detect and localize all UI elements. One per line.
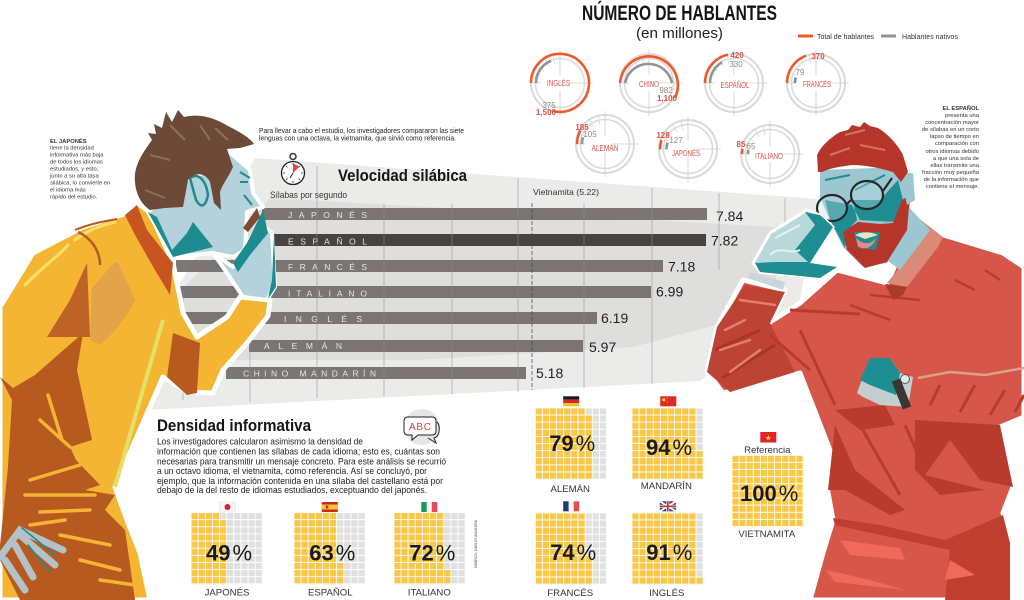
icon: abc speech bubbles — [404, 409, 440, 445]
annotation: el español: ellas transmite una — [930, 163, 980, 169]
annotation: el japonés: informativa más baja — [50, 152, 104, 158]
teal back of hand — [860, 358, 900, 395]
chart background wedge — [147, 158, 818, 410]
flag: uk — [660, 501, 676, 511]
gauge: chino — [620, 50, 682, 116]
bar: alemán: 5.97 — [589, 339, 616, 355]
bar: alemán — [249, 339, 616, 355]
annotation: el japonés: el idioma más — [50, 188, 86, 194]
illustration: man in yellow sweater whispering — [0, 110, 276, 600]
annotation: el español: presenta una — [945, 113, 980, 119]
axis label: sílabas por segundo: Sílabas por segundo — [270, 189, 347, 200]
waffle: español: ESPAÑOL — [308, 588, 353, 598]
gauge: alemán: 105 — [583, 130, 597, 139]
lips — [856, 238, 876, 248]
gauge: francés — [787, 50, 849, 116]
gauge: alemán: 185 — [575, 123, 589, 132]
density paragraph: Los investigadores calcularon asimismo la densidad de — [157, 436, 363, 446]
hair — [817, 122, 908, 182]
neck and face — [148, 150, 263, 257]
gauge: español: ESPAÑOL — [720, 81, 750, 90]
teal hand shadow — [233, 210, 276, 299]
legend — [798, 32, 958, 41]
annotation: el japonés: rápido del estudio. — [50, 194, 98, 200]
annotation: el español: EL ESPAÑOL — [942, 105, 979, 112]
waffle: francés: FRANCÉS — [547, 588, 593, 599]
gauge: alemán — [575, 111, 638, 177]
sweater silhouette — [0, 203, 270, 600]
gauge: chino: 982 — [659, 86, 673, 95]
collar v-neck shade — [885, 284, 907, 300]
waffle: alemán — [536, 396, 607, 495]
gauge: chino: CHINO — [639, 80, 659, 89]
gauge: italiano: 65 — [747, 142, 756, 151]
waffle: alemán: 79% — [549, 431, 595, 456]
annotation: el japonés: junto a su alta tasa — [49, 174, 99, 180]
icon: stopwatch — [282, 154, 304, 184]
teal face shading — [825, 180, 903, 248]
bar: japonés: JAPONÉS — [288, 210, 367, 220]
waffle: inglés: INGLÉS — [649, 588, 684, 599]
annotation: el español: a que una sola de — [933, 156, 979, 162]
bar: italiano — [176, 284, 683, 300]
watch face — [900, 374, 910, 384]
waffle: vietnamita: VIETNAMITA — [738, 529, 796, 540]
shirt collar — [887, 217, 943, 287]
density paragraph: debajo de la del resto de idiomas estudiados, exceptuando del japonés. — [157, 485, 427, 495]
bar: español: ESPAÑOL — [288, 236, 367, 246]
waffle: japonés: JAPONÉS — [205, 588, 249, 598]
density paragraph: información que contienen las sílabas de cada idioma; esto es, cuántas son — [157, 446, 440, 456]
annotation: el español: de sílabas en un corto — [922, 127, 979, 133]
watch hand — [857, 358, 913, 407]
flag: japan — [220, 502, 236, 512]
icon: abc speech bubbles: ABC — [409, 422, 431, 433]
waffle: inglés — [632, 501, 704, 599]
mustache — [243, 208, 260, 232]
density paragraph — [157, 436, 446, 495]
gauge: español: 420 — [730, 51, 744, 60]
flag: france — [563, 501, 579, 511]
hair highlights — [145, 125, 228, 198]
reference label: vietnamita: Vietnamita (5.22) — [533, 187, 599, 197]
gauge: inglés: 1,500 — [536, 108, 557, 117]
annotation: el japonés — [49, 137, 110, 200]
bar: inglés: INGLÉS — [284, 314, 362, 324]
waffle: alemán: ALEMÁN — [550, 484, 590, 495]
intro text: lenguas con una octava, la vietnamita, que sirvió como referencia. — [259, 134, 456, 142]
beard — [843, 195, 910, 268]
neck — [887, 205, 930, 270]
waffle: vietnamita: Referencia — [744, 445, 791, 456]
credit: GRÁFICO: CARLOS AGUILERA — [474, 520, 478, 568]
waffle: japonés: 49% — [206, 541, 252, 566]
annotation: el español: comparación con — [935, 141, 979, 147]
gauge: chino: 1,100 — [657, 94, 678, 103]
waffle: mandarín — [632, 396, 704, 492]
bar: italiano: ITALIANO — [288, 288, 367, 298]
annotation: el japonés: de todos los idiomas — [50, 160, 103, 166]
illustration: man in red sweater checking watch — [707, 122, 1024, 600]
bar: japonés — [262, 208, 743, 224]
gauge: italiano: ITALIANO — [755, 152, 783, 161]
hand highlights — [770, 225, 800, 255]
heading: densidad informativa: Densidad informativa — [157, 416, 311, 435]
cuff — [748, 272, 785, 290]
bar: francés: 7.18 — [668, 258, 695, 274]
density paragraph: necesarias para transmitir un mensaje concreto. Para este análisis se recurrió — [157, 456, 446, 466]
gauge: japonés: 127 — [669, 136, 683, 145]
bar: español: 7.82 — [711, 232, 738, 248]
bar: español — [262, 232, 738, 248]
flag: spain — [322, 502, 338, 512]
gauge: inglés — [531, 50, 593, 117]
face — [820, 167, 910, 267]
annotation: el español: fracción muy pequeña — [922, 170, 980, 176]
heading: velocidad silábica: Velocidad silábica — [338, 167, 468, 185]
gauge: japonés: 128 — [656, 131, 670, 140]
mouth — [854, 232, 880, 250]
hair — [135, 110, 254, 210]
bar: alemán: ALEMÁN — [264, 341, 342, 351]
chart grid lines — [183, 166, 785, 402]
bar: inglés: 6.19 — [601, 310, 628, 326]
bar chart — [176, 208, 743, 381]
gauge: italiano: 85 — [737, 140, 746, 149]
waffle: inglés: 91% — [646, 540, 692, 565]
gauge: inglés: 375 — [542, 101, 556, 110]
flag: germany — [563, 396, 579, 406]
waffle: vietnamita: 100% — [740, 481, 798, 506]
gauge: francés: 370 — [811, 52, 825, 61]
teal neck shadow — [148, 212, 213, 257]
bar: chino mandarín: 5.18 — [536, 365, 563, 381]
annotation: el español: contiene el mensaje. — [926, 184, 979, 190]
ear — [190, 176, 208, 205]
waffle: francés: 74% — [550, 540, 596, 565]
waffle: japonés — [192, 502, 263, 598]
teeth — [855, 232, 878, 239]
annotation: el español: lapso de tiempo en — [930, 134, 979, 140]
bar: japonés: 7.84 — [716, 208, 743, 224]
waffle: francés — [536, 501, 607, 599]
waffle: mandarín: 94% — [646, 435, 692, 460]
flag: china — [660, 396, 676, 406]
title: NÚMERO DE HABLANTES — [582, 1, 777, 25]
density paragraph: a un octavo idioma, el vietnamita, como referencia. Así se concluyó, por — [157, 466, 427, 476]
forehead lines — [825, 175, 885, 190]
bar: chino mandarín — [226, 365, 563, 381]
title: (en millones) — [636, 25, 723, 42]
legend: Hablantes nativos — [902, 32, 958, 41]
flag: vietnam: ★ — [765, 434, 772, 443]
gauge: español — [705, 50, 767, 116]
hand on hip — [0, 528, 63, 590]
bar: italiano: 6.99 — [656, 284, 683, 300]
intro text: Para llevar a cabo el estudio, los investigadores compararon las siete — [259, 126, 464, 135]
annotation: el español: de la información que — [924, 177, 979, 183]
waffle: italiano — [394, 502, 466, 598]
waffle: español: 63% — [309, 541, 355, 566]
annotation: el japonés: EL JAPONÉS — [50, 137, 87, 145]
annotation: el español: otros idiomas debido — [926, 149, 979, 155]
gauge: italiano — [737, 121, 803, 187]
sweater shading — [0, 205, 200, 600]
flag: italy — [421, 502, 437, 512]
legend: Total de hablantes — [817, 32, 874, 41]
gauge: alemán: ALEMÁN — [592, 144, 619, 153]
gauge: francés: FRANCÉS — [803, 80, 831, 89]
annotation: el japonés: estudiados, y esto, — [50, 166, 99, 172]
annotation: el español: concentración mayor — [925, 120, 979, 126]
gauge: inglés: INGLÉS — [547, 79, 570, 88]
hand at mouth — [213, 223, 275, 300]
waffle: español — [294, 502, 366, 598]
density paragraph: ejemplo, que la información contenida en una sílaba del castellano está por — [157, 476, 443, 486]
bar: francés: FRANCÉS — [288, 262, 367, 272]
bar: francés — [176, 258, 695, 274]
bar: inglés — [184, 310, 628, 326]
raised hand — [753, 210, 837, 278]
gauge: japonés — [656, 116, 721, 182]
glasses — [817, 178, 892, 221]
intro text — [259, 126, 464, 142]
waffle: vietnamita — [732, 432, 804, 540]
teal hand shading — [755, 212, 837, 278]
bar: chino mandarín: CHINO MANDARÍN — [243, 368, 376, 378]
gauge: japonés: JAPONÉS — [672, 149, 700, 158]
title — [582, 1, 777, 42]
annotation: el español — [922, 105, 980, 190]
gauge: español: 330 — [729, 60, 743, 69]
sweater shading — [707, 270, 1024, 600]
annotation: el japonés: tiene la densidad — [50, 146, 94, 152]
annotation: el japonés: silábica, lo convierte en — [50, 180, 110, 186]
eye and brow — [240, 172, 252, 205]
waffle: italiano: ITALIANO — [408, 588, 451, 598]
gauge: francés: 79 — [796, 68, 805, 77]
wristwatch — [896, 380, 907, 408]
hair highlight — [830, 130, 885, 155]
ear — [900, 173, 915, 205]
sweater silhouette — [707, 217, 1024, 600]
waffle: mandarín: MANDARÍN — [641, 481, 692, 492]
waffle: italiano: 72% — [409, 541, 455, 566]
